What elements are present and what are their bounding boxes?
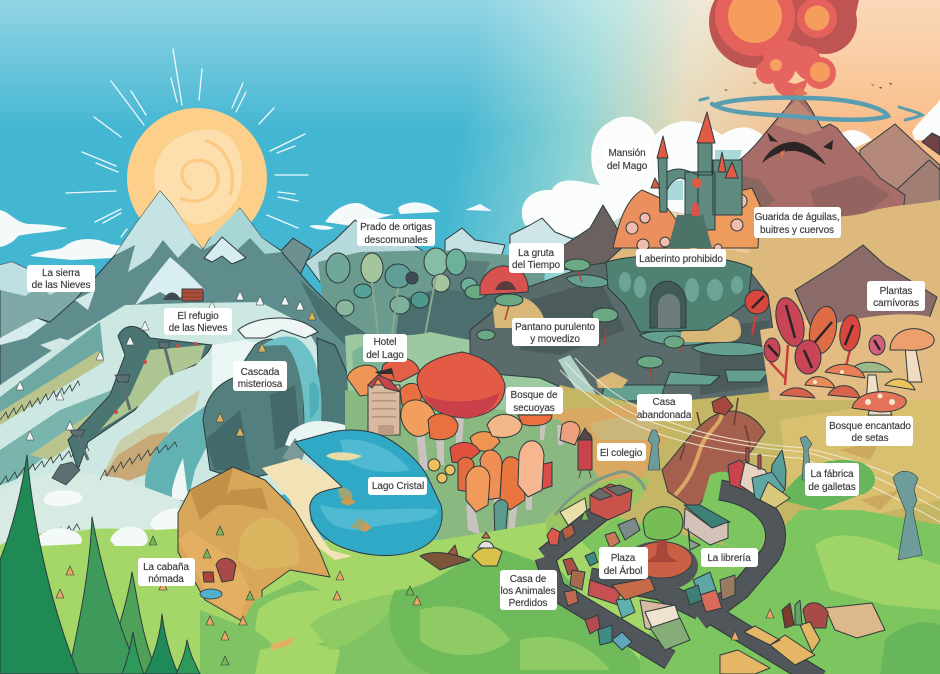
label: El colegio: El colegio	[600, 448, 643, 459]
label: Cascada misteriosa	[233, 361, 287, 391]
label: Guarida de águilas, buitres y cuervos: buitres y cuervos	[760, 225, 834, 236]
label: Mansión del Mago	[605, 143, 650, 173]
label: Lago Cristal	[368, 477, 427, 495]
cabin hill	[178, 467, 330, 620]
label: La librería	[701, 548, 758, 567]
beach	[262, 458, 352, 560]
label: Casa de los Animales Perdidos	[500, 570, 557, 610]
label: La fábrica de galletas: de galletas	[808, 482, 856, 493]
label: Hotel del Lago: del Lago	[366, 350, 404, 361]
label: Prado de ortigas descomunales: Prado de ortigas	[360, 222, 432, 233]
label: Pantano purulento y movedizo: Pantano purulento	[515, 322, 596, 333]
label: La gruta del Tiempo: del Tiempo	[512, 260, 560, 271]
pylons	[648, 430, 922, 560]
label: Laberinto prohibido: Laberinto prohibido	[639, 254, 723, 265]
label: Bosque de secuoyas: Bosque de	[511, 390, 558, 401]
sky patch behind castle	[667, 150, 742, 200]
label: Mansión del Mago: del Mago	[607, 161, 648, 172]
plaza del arbol	[622, 507, 698, 591]
label: Plantas carnívoras: carnívoras	[873, 298, 919, 309]
label: Cascada misteriosa: Cascada	[241, 367, 280, 378]
label: Bosque de secuoyas: secuoyas	[513, 403, 555, 414]
volcano eruption	[709, 0, 860, 97]
snow slopes	[0, 302, 330, 565]
mountain range: la sierra de las Nieves	[0, 191, 367, 440]
label: La sierra de las Nieves	[27, 265, 95, 292]
angry volcano	[722, 86, 905, 240]
label: La librería: La librería	[707, 553, 751, 564]
label: La sierra de las Nieves: La sierra	[42, 268, 81, 279]
label: Casa de los Animales Perdidos: Casa de	[510, 574, 547, 585]
mid ground tan band	[540, 385, 940, 674]
label: El refugio de las Nieves: El refugio	[177, 311, 219, 322]
panel: prado de ortigas	[318, 248, 545, 345]
label: La sierra de las Nieves: de las Nieves	[32, 280, 90, 291]
roads	[545, 490, 820, 674]
smoke ring	[700, 98, 922, 120]
carnivorous plants	[745, 290, 940, 400]
label: Mansión del Mago: Mansión	[608, 148, 646, 159]
label: La fábrica de galletas: La fábrica	[811, 469, 854, 480]
label: Hotel del Lago: Hotel	[374, 337, 396, 348]
orange bushes with eagles nests	[613, 188, 760, 252]
label: Prado de ortigas descomunales: descomunales	[364, 235, 428, 246]
label: Pantano purulento y movedizo: y movedizo	[530, 334, 580, 345]
ski lift cliff	[52, 326, 212, 485]
hotel del lago	[368, 368, 400, 435]
label: Casa de los Animales Perdidos: los Animales	[501, 586, 556, 597]
label: Bosque de secuoyas	[506, 387, 563, 414]
flat acacia trees	[465, 259, 684, 382]
far mountains centre	[280, 205, 937, 330]
sun rays	[66, 49, 308, 237]
birds	[724, 61, 892, 91]
label: Casa abandonada: abandonada	[637, 410, 692, 421]
power lines	[560, 358, 940, 522]
right lower ground	[640, 460, 940, 674]
casa abandonada hill	[662, 396, 765, 510]
sun	[127, 108, 267, 248]
water tower and cookie factory	[578, 428, 790, 508]
frozen pond	[238, 318, 318, 338]
label: Guarida de águilas, buitres y cuervos	[754, 207, 841, 238]
town buildings	[547, 484, 735, 650]
midground hills behind lake	[345, 332, 575, 430]
laberinto prohibido	[606, 255, 752, 332]
label: Plantas carnívoras	[867, 281, 925, 311]
label: La gruta del Tiempo	[509, 243, 564, 273]
label: La fábrica de galletas	[805, 463, 859, 496]
cliffs and waterfall: cascada misteriosa	[203, 336, 352, 480]
rescue centre	[420, 532, 502, 570]
clouds left	[0, 202, 492, 260]
lawn base	[0, 508, 780, 674]
label: Casa de los Animales Perdidos: Perdidos	[509, 598, 547, 609]
label: Hotel del Lago	[363, 334, 407, 362]
label: Cascada misteriosa: misteriosa	[238, 379, 283, 390]
label: Casa abandonada	[637, 394, 692, 421]
label: La cabaña nómada	[138, 558, 195, 586]
pale waterfall	[558, 355, 600, 405]
label: Plaza del Árbol: del Árbol	[604, 564, 642, 577]
red and orange forest: bosque de secuoyas	[345, 352, 600, 540]
enchanted mushrooms	[780, 329, 934, 415]
label: Casa abandonada: Casa	[653, 397, 676, 408]
rock terraces	[470, 258, 775, 410]
label: Plaza del Árbol	[599, 547, 648, 579]
label: Lago Cristal: Lago Cristal	[372, 481, 424, 492]
refuge cabin	[163, 289, 203, 301]
label: Guarida de águilas, buitres y cuervos: Guarida de águilas,	[755, 212, 839, 223]
clouds middle	[522, 100, 940, 240]
large conifer trees	[0, 455, 200, 674]
label: Pantano purulento y movedizo	[512, 318, 599, 346]
label: La gruta del Tiempo: La gruta	[518, 248, 554, 259]
label: Prado de ortigas descomunales	[357, 219, 435, 246]
back mountains right	[860, 124, 940, 260]
la gruta del tiempo	[480, 266, 528, 295]
label: El refugio de las Nieves: de las Nieves	[169, 323, 227, 334]
label: La cabaña nómada: nómada	[148, 574, 184, 585]
label: Bosque encantado de setas: Bosque encantado	[829, 421, 911, 432]
small tree clusters	[16, 291, 774, 665]
tan clouds right	[596, 200, 940, 320]
label: Bosque encantado de setas	[826, 416, 913, 446]
label: El refugio de las Nieves	[164, 308, 232, 335]
lake inner islands	[340, 496, 372, 532]
label: Plaza del Árbol: Plaza	[611, 553, 636, 564]
label: Laberinto prohibido	[636, 249, 726, 267]
la cabaña nomada	[200, 558, 305, 618]
lago cristal	[295, 430, 442, 556]
label: Plantas carnívoras: Plantas	[880, 286, 912, 297]
yellow clouds over rock	[493, 297, 741, 388]
school grounds	[545, 472, 650, 555]
label: La cabaña nómada: La cabaña	[143, 562, 189, 573]
farm and barn	[720, 600, 885, 674]
label: Bosque encantado de setas: de setas	[851, 433, 889, 444]
mansion del mago castle	[651, 112, 742, 248]
label: El colegio	[597, 443, 646, 461]
green meadows	[200, 545, 640, 674]
